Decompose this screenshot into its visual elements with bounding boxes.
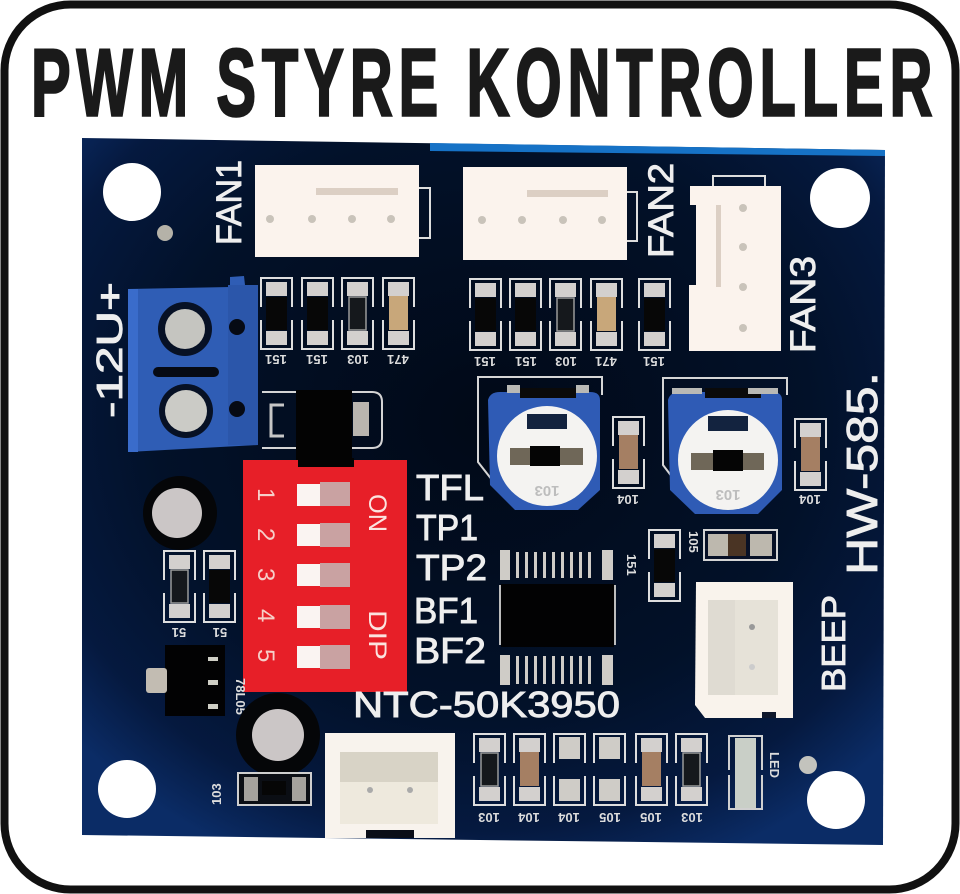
- IC chip: [499, 550, 639, 685]
- resistors: top row: 151: [643, 354, 665, 369]
- LED: [729, 736, 782, 809]
- switch labels: TFL: [416, 467, 484, 508]
- connector: FAN2: FAN2: [642, 163, 681, 258]
- DIP switch: 2: [252, 528, 279, 541]
- LED: LED: [767, 752, 782, 778]
- jumper: [262, 390, 382, 468]
- resistors: bottom row: 105: [640, 810, 662, 825]
- connector: FAN1: [210, 160, 430, 257]
- DIP switch: ON: [363, 494, 391, 532]
- resistors: bottom row: 103: [478, 810, 500, 825]
- capacitor: upper: [143, 476, 217, 550]
- transistor: 78L05: [233, 678, 248, 715]
- resistors: top row: 151: [515, 354, 537, 369]
- resistors: bottom row: 104: [557, 810, 580, 825]
- board base: [82, 138, 885, 845]
- switch labels: TP2: [416, 547, 487, 588]
- resistors: top row: 471: [387, 352, 409, 367]
- resistors beside potentiometers: [613, 417, 826, 507]
- connector: BEEP: BEEP: [815, 595, 852, 692]
- connector: BEEP: [695, 582, 852, 718]
- trimmer potentiometer 2: 103: [715, 486, 741, 503]
- resistors: below capacitor: 51: [172, 625, 186, 640]
- DIP switch: DIP: [363, 610, 391, 660]
- resistors: bottom row: 104: [517, 810, 540, 825]
- circuit board: [82, 138, 887, 845]
- IC chip: 151: [624, 554, 639, 576]
- transistor: [146, 645, 248, 716]
- resistors beside potentiometers: 104: [616, 492, 639, 507]
- connector: FAN1: FAN1: [210, 160, 249, 245]
- resistors: bottom row: 103: [681, 810, 703, 825]
- resistors: below capacitor: [164, 551, 235, 640]
- connector: sensor: [325, 733, 455, 838]
- switch labels: TP1: [416, 507, 478, 548]
- DIP switch: 1: [252, 488, 279, 501]
- resistors: top row: 103: [555, 354, 577, 369]
- resistors: top row: 471: [595, 354, 617, 369]
- resistors: below capacitor: 51: [213, 625, 227, 640]
- resistor: horizontal 103: [209, 773, 311, 805]
- resistor: horizontal 103: 103: [209, 783, 224, 805]
- resistors: beside IC: [649, 530, 777, 601]
- DIP switch: [243, 458, 407, 692]
- resistors: top row: 151: [265, 352, 287, 367]
- board model label: HW-585.: [838, 372, 887, 575]
- resistors: bottom row: 105: [599, 810, 621, 825]
- connector: FAN2: [463, 163, 681, 260]
- resistors: top row: 103: [347, 352, 369, 367]
- switch labels: [414, 467, 487, 671]
- connector: FAN3: FAN3: [784, 256, 823, 353]
- trimmer potentiometer 2: [663, 378, 787, 514]
- power label: -12U+: [89, 282, 130, 418]
- resistors: bottom row: [474, 734, 707, 825]
- switch labels: BF2: [414, 630, 486, 671]
- title: PWM STYRE KONTROLLER: [31, 29, 932, 136]
- capacitor: lower: [236, 693, 320, 777]
- switch labels: BF1: [414, 590, 478, 631]
- DIP switch: 3: [252, 568, 279, 581]
- connector: FAN3: [689, 176, 823, 353]
- terminal block: [128, 276, 258, 452]
- sensor label: NTC-50K3950: [353, 684, 620, 725]
- trimmer potentiometer 1: [478, 377, 602, 510]
- resistors beside potentiometers: 104: [798, 492, 821, 507]
- resistors: beside IC: 105: [686, 531, 701, 553]
- DIP switch: 4: [252, 609, 279, 622]
- resistors: top row: 151: [306, 352, 328, 367]
- resistors: top row: [261, 278, 670, 369]
- DIP switch: 5: [252, 649, 279, 662]
- mounting holes: [98, 163, 870, 829]
- resistors: top row: 151: [474, 354, 496, 369]
- trimmer potentiometer 1: 103: [534, 482, 560, 499]
